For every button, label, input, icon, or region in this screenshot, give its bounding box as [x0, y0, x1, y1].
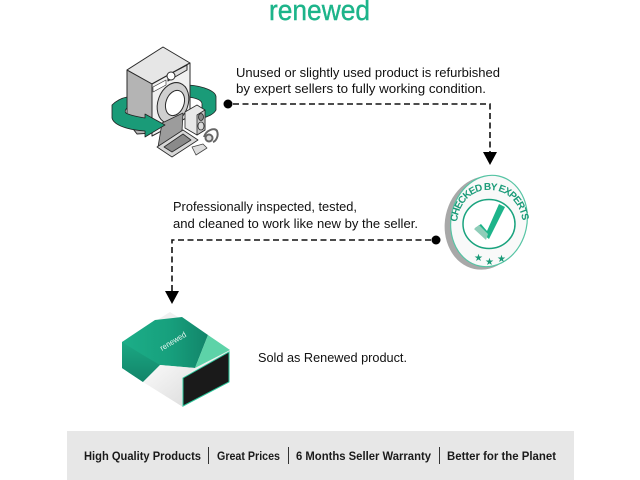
- text: step two description: and cleaned to work like new by the seller.: [173, 217, 418, 231]
- headphones: [204, 129, 218, 142]
- text: step one description: [236, 66, 500, 96]
- three stars: ★: [474, 253, 483, 264]
- benefit labels: 6 Months Seller Warranty: [296, 451, 432, 463]
- three stars: [474, 253, 506, 268]
- icon: washing machine and electronics with circular arrow: [112, 47, 218, 157]
- text: step one description: Unused or slightly used product is refurbished: [236, 66, 500, 80]
- arrow: front part of the circular band: [112, 97, 165, 137]
- text: step two description: [173, 200, 418, 231]
- speaker: [185, 105, 205, 135]
- arrow: dashed connector from step one to medal: [224, 100, 497, 165]
- benefit labels: Better for the Planet: [447, 451, 556, 463]
- phone: [192, 144, 207, 155]
- check mark: [475, 204, 505, 239]
- icon: renewed box: [122, 312, 230, 407]
- three stars: ★: [485, 257, 494, 268]
- icon: checked by experts medal: [444, 174, 529, 270]
- three stars: ★: [497, 254, 506, 265]
- benefit labels: High Quality Products: [84, 451, 201, 463]
- medal lettering: [457, 190, 523, 224]
- icon: checked by experts medal: CHECKED BY EXPERTS: [450, 183, 529, 221]
- benefit labels: [84, 451, 556, 463]
- laptop: [157, 113, 198, 157]
- arrow: back part of the circular band: [188, 85, 216, 118]
- arrow: dashed connector from medal to box: [165, 236, 440, 304]
- text: step one description: by expert sellers to fully working condition.: [236, 82, 486, 96]
- box logo: renewed: [158, 330, 188, 353]
- benefit labels: Great Prices: [217, 451, 280, 463]
- text: step three description: Sold as Renewed product.: [258, 351, 407, 365]
- panel: benefits bar: [67, 431, 574, 480]
- text: step two description: Professionally inspected, tested,: [173, 200, 357, 214]
- washing machine: [127, 47, 194, 136]
